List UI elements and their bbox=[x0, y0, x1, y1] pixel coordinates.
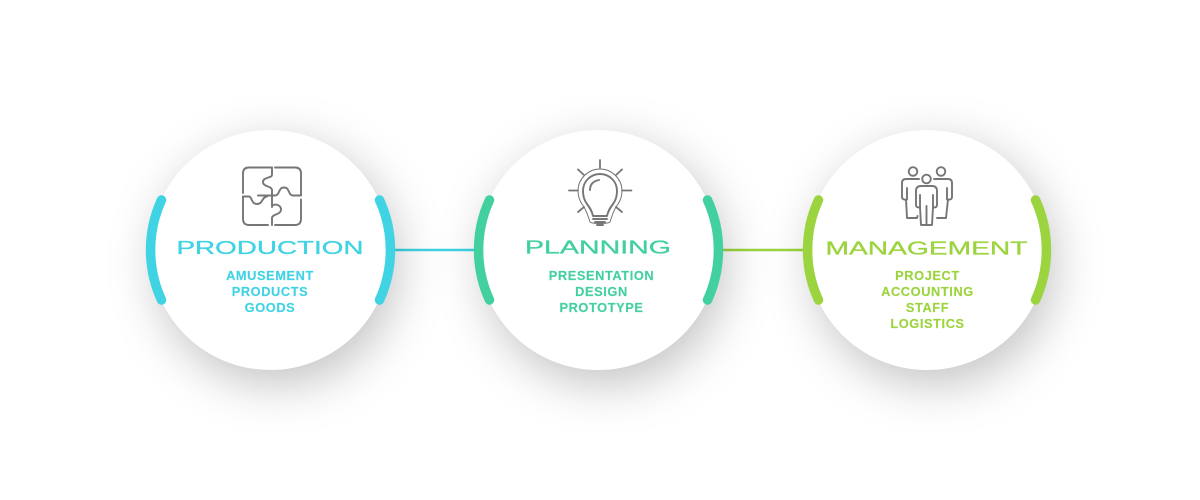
circle shadow bbox=[157, 144, 397, 384]
circle bbox=[807, 130, 1047, 370]
list: STAFF bbox=[906, 300, 949, 315]
connector: planning to management bbox=[716, 249, 810, 251]
right arc bbox=[708, 200, 718, 300]
panel: planning bbox=[478, 130, 725, 384]
connector: production to planning bbox=[390, 249, 480, 251]
list bbox=[226, 268, 314, 315]
list bbox=[549, 268, 654, 315]
icon: puzzle bbox=[243, 168, 301, 225]
left arc bbox=[479, 200, 490, 300]
list: PRODUCTS bbox=[232, 284, 308, 299]
left arc bbox=[808, 200, 818, 300]
circle shadow bbox=[814, 144, 1054, 384]
list bbox=[881, 268, 974, 331]
list: PRESENTATION bbox=[549, 268, 654, 283]
circle bbox=[478, 130, 718, 370]
list: GOODS bbox=[245, 300, 295, 315]
right arc bbox=[380, 200, 390, 300]
list: DESIGN bbox=[575, 284, 628, 299]
list: AMUSEMENT bbox=[226, 268, 314, 283]
title: PRODUCTION bbox=[176, 237, 364, 258]
list: ACCOUNTING bbox=[881, 284, 974, 299]
title: MANAGEMENT bbox=[826, 238, 1028, 258]
list: PROTOTYPE bbox=[559, 300, 644, 315]
panel: production bbox=[150, 130, 397, 384]
list: LOGISTICS bbox=[890, 316, 965, 331]
icon: team bbox=[902, 167, 952, 225]
icon: light bulb bbox=[569, 160, 632, 225]
circle bbox=[150, 130, 390, 370]
circle shadow bbox=[485, 144, 725, 384]
panel: management bbox=[807, 130, 1054, 384]
list: PROJECT bbox=[895, 268, 960, 283]
left arc bbox=[151, 200, 162, 300]
title: PLANNING bbox=[525, 236, 671, 258]
right arc bbox=[1036, 200, 1046, 300]
